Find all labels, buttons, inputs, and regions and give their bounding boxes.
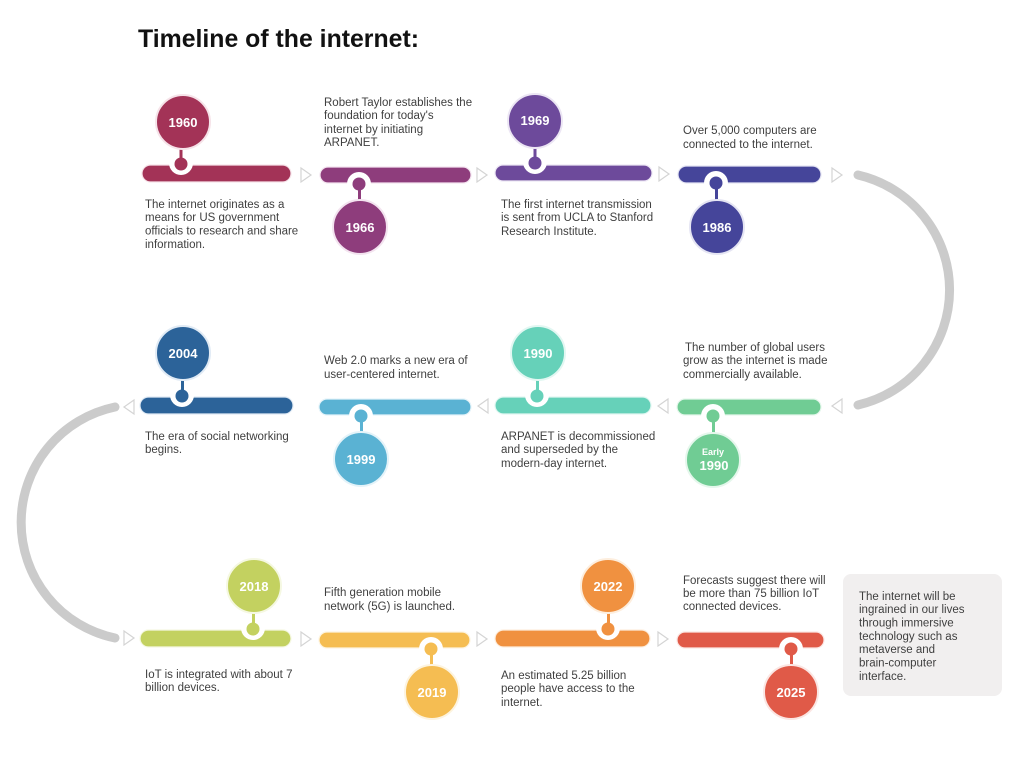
bar [140, 630, 291, 647]
arrow [477, 168, 487, 182]
bar [677, 632, 824, 648]
year badge [334, 432, 388, 486]
arrow [658, 632, 668, 646]
bar [319, 632, 470, 648]
milestone: Early 1990 [677, 342, 827, 487]
arrow [124, 400, 134, 414]
milestone: 2004 [140, 326, 293, 456]
year badge: 1999 [347, 452, 375, 467]
milestone: 2019 [319, 587, 470, 719]
year badge [686, 433, 740, 487]
milestone: 1990 [495, 326, 655, 470]
year badge [764, 665, 818, 719]
pin [779, 637, 803, 667]
bar [677, 399, 821, 415]
year badge: 2004 [169, 346, 198, 361]
bar [320, 167, 471, 183]
description: modern-day internet. [501, 458, 607, 470]
description: connected devices. [683, 601, 781, 613]
year badge: 1990 [700, 458, 728, 473]
pin [525, 378, 549, 407]
year badge [227, 559, 281, 613]
milestone: 2018 [140, 559, 292, 694]
description: be more than 75 billion IoT [683, 588, 819, 600]
description: The era of social networking [145, 431, 289, 443]
milestone: 1986 [678, 125, 821, 254]
bar [142, 165, 291, 182]
description: Robert Taylor establishes the [324, 97, 472, 109]
description: foundation for today's [324, 110, 434, 122]
pin [704, 171, 728, 201]
description: people have access to the [501, 683, 635, 695]
pin [170, 378, 194, 407]
description: An estimated 5.25 billion [501, 670, 626, 682]
description: Forecasts suggest there will [683, 575, 826, 587]
arrow [301, 632, 311, 646]
description: ARPANET is decommissioned [501, 431, 655, 443]
description: billion devices. [145, 682, 220, 694]
bar [495, 397, 651, 414]
description: The first internet transmission [501, 199, 652, 211]
description: officials to research and share [145, 226, 298, 238]
year badge: 1969 [521, 113, 549, 128]
callout text: brain-computer [859, 658, 937, 670]
description: IoT is integrated with about 7 [145, 669, 292, 681]
pin [419, 637, 443, 667]
description: internet by initiating [324, 124, 423, 136]
milestone: 2022 [495, 559, 650, 709]
description: means for US government [145, 212, 280, 224]
arrow [832, 399, 842, 413]
arrow: right curved connector [858, 175, 950, 405]
arrow [301, 168, 311, 182]
bar [140, 397, 293, 414]
callout text: The internet will be [859, 591, 956, 603]
pin [241, 611, 265, 640]
year badge [405, 665, 459, 719]
pin [523, 145, 547, 174]
pin [596, 611, 620, 640]
callout: future of the internet [843, 574, 1002, 696]
description: commercially available. [683, 369, 802, 381]
milestone: 2025 [677, 575, 826, 719]
description: information. [145, 239, 205, 251]
bar [495, 630, 650, 647]
year badge [333, 200, 387, 254]
description: is sent from UCLA to Stanford [501, 212, 653, 224]
description: Over 5,000 computers are [683, 125, 817, 137]
title: Timeline of the internet: [138, 25, 419, 53]
callout text: technology such as [859, 631, 958, 643]
callout text: metaverse and [859, 644, 935, 656]
description: Fifth generation mobile [324, 587, 441, 599]
description: grow as the internet is made [683, 355, 827, 367]
milestone: 1999 [319, 355, 471, 486]
pin [349, 404, 373, 434]
milestone: 1960 [142, 95, 298, 251]
arrow [477, 632, 487, 646]
callout text: ingrained in our lives [859, 604, 965, 616]
pin [347, 172, 371, 202]
description: network (5G) is launched. [324, 601, 455, 613]
milestone: 1969 [495, 94, 653, 238]
description: connected to the internet. [683, 139, 813, 151]
description: and superseded by the [501, 444, 618, 456]
arrow [832, 168, 842, 182]
year badge: 2022 [594, 579, 622, 594]
year badge [508, 94, 562, 148]
description: ARPANET. [324, 137, 379, 149]
callout background [843, 574, 1002, 696]
year badge [156, 95, 210, 149]
description: internet. [501, 697, 543, 709]
description: Research Institute. [501, 226, 597, 238]
arrow [658, 399, 668, 413]
year badge: 1966 [346, 220, 374, 235]
arrow [478, 399, 488, 413]
milestone: 1966 [320, 97, 472, 254]
description: The internet originates as a [145, 199, 285, 211]
year badge: Early [702, 447, 724, 457]
pin [169, 145, 193, 175]
year badge: 1990 [524, 346, 552, 361]
year badge [690, 200, 744, 254]
bar [495, 165, 652, 181]
callout text: through immersive [859, 618, 954, 630]
pin [701, 404, 725, 434]
description: user-centered internet. [324, 369, 440, 381]
description: Web 2.0 marks a new era of [324, 355, 468, 367]
year badge: 1986 [703, 220, 731, 235]
year badge: 2019 [418, 685, 446, 700]
bar [319, 399, 471, 415]
year badge: 2018 [240, 579, 268, 594]
description: The number of global users [685, 342, 825, 354]
year badge: 1960 [169, 115, 197, 130]
year badge [581, 559, 635, 613]
year badge: 2025 [777, 685, 805, 700]
arrow [659, 167, 669, 181]
description: begins. [145, 444, 182, 456]
arrow [124, 631, 134, 645]
year badge [511, 326, 565, 380]
callout text: interface. [859, 671, 906, 683]
year badge [156, 326, 210, 380]
arrow: left curved connector [21, 407, 115, 638]
bar [678, 166, 821, 183]
